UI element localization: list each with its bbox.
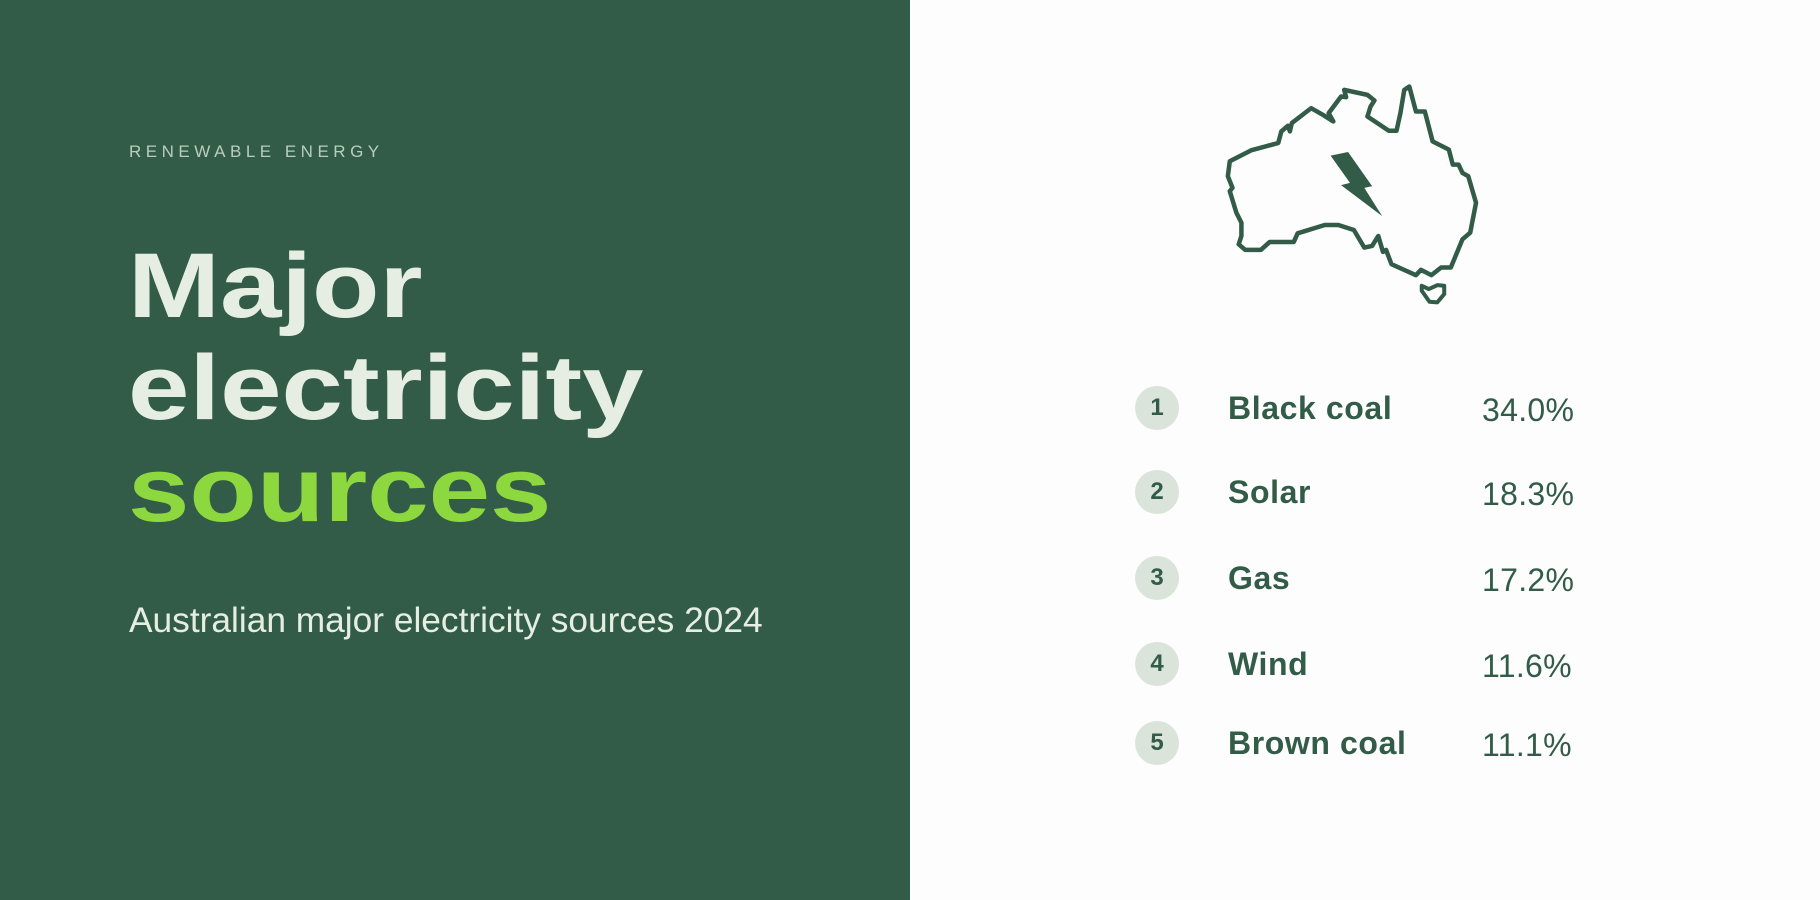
row 3: 3: [1150, 564, 1164, 591]
row 4: [1135, 642, 1572, 686]
list: electricity sources: [1135, 386, 1574, 765]
row 2: 18.3%: [1482, 476, 1574, 512]
row 5: 5: [1150, 729, 1164, 756]
row 1: Black coal: [1228, 390, 1392, 426]
row 1: 1: [1150, 394, 1164, 421]
row 3: 17.2%: [1482, 562, 1574, 598]
subtitle: Australian major electricity sources 2024: [129, 601, 763, 640]
row 5: [1135, 721, 1572, 765]
row 4: 11.6%: [1482, 648, 1572, 684]
kicker label: RENEWABLE ENERGY: [129, 142, 384, 161]
row 2: Solar: [1228, 474, 1311, 510]
title: electricity: [128, 337, 644, 439]
row 4: Wind: [1228, 646, 1308, 682]
title: Major: [128, 235, 422, 337]
row 1: [1135, 386, 1574, 430]
title: [128, 235, 644, 541]
row 4: 4: [1150, 650, 1164, 677]
panel: left title panel: [0, 0, 910, 900]
row 3: Gas: [1228, 560, 1290, 596]
row 1: 34.0%: [1482, 392, 1574, 428]
row 5: 11.1%: [1482, 727, 1572, 763]
row 3: [1135, 556, 1574, 600]
row 5: Brown coal: [1228, 725, 1406, 761]
title: sources: [128, 439, 551, 541]
row 2: [1135, 470, 1574, 514]
row 2: 2: [1150, 478, 1164, 505]
icon: australia map with lightning bolt: [1226, 84, 1478, 304]
